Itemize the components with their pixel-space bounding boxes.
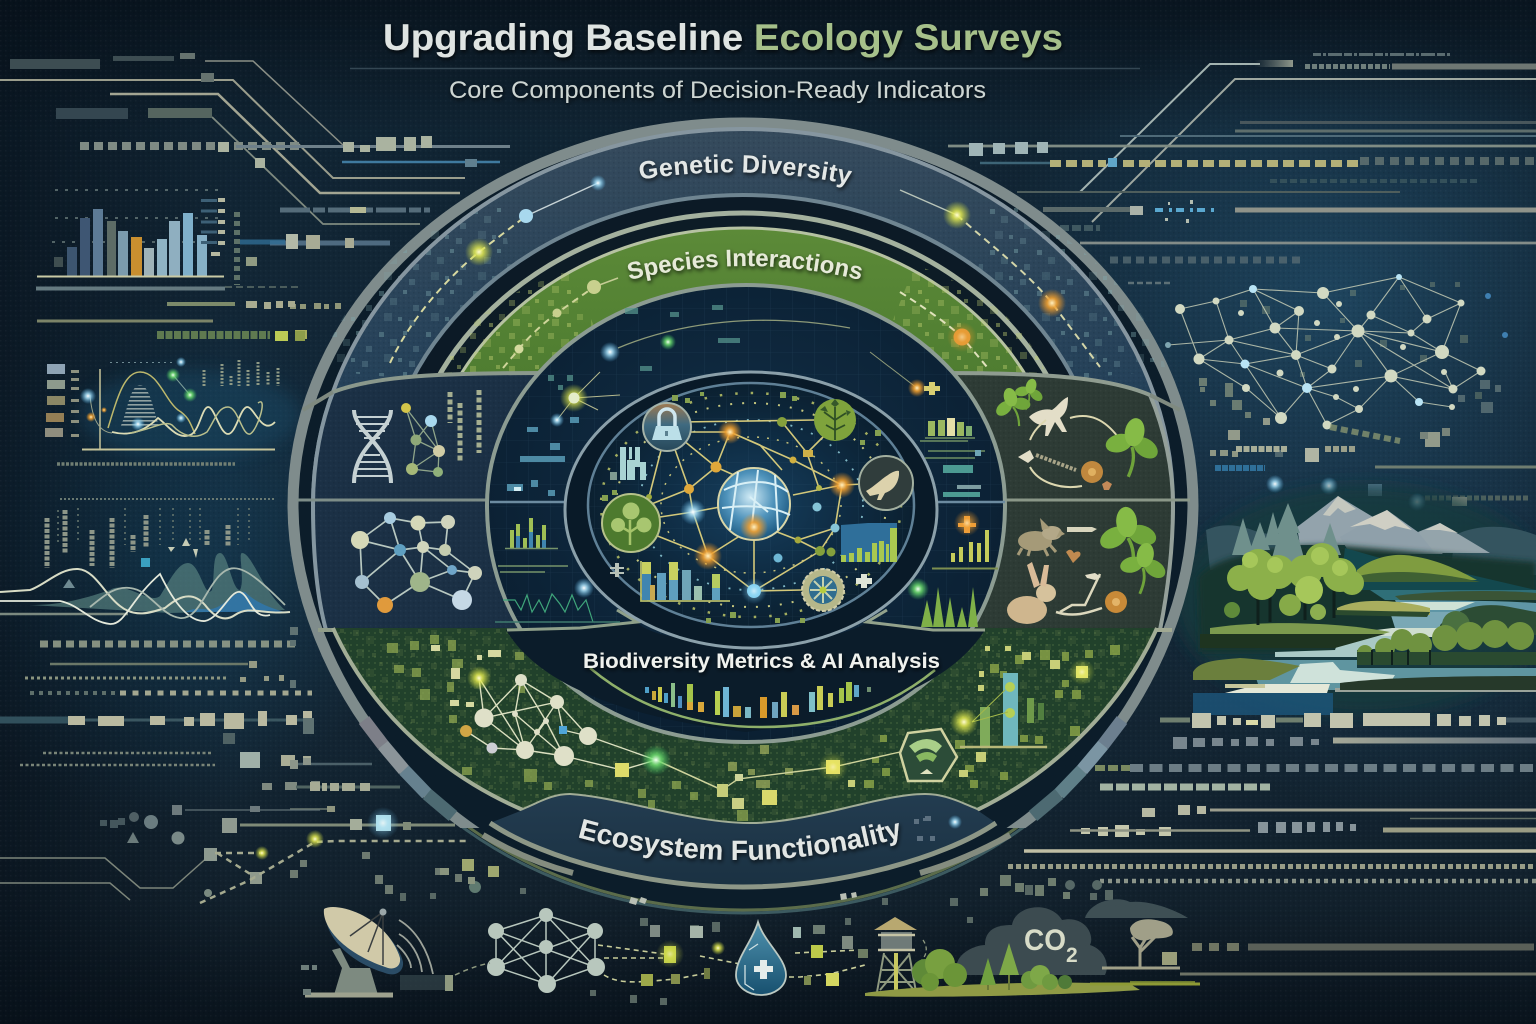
icon: bird bbox=[859, 456, 913, 510]
icon: satellite dish bbox=[301, 907, 453, 995]
label: species interactions: Species Interactions bbox=[626, 250, 864, 285]
plus signs bbox=[610, 563, 872, 588]
icons: species interaction lower bbox=[1007, 504, 1173, 624]
title: Upgrading Baseline Ecology Surveys bbox=[383, 17, 1063, 58]
circuit lines top left bbox=[0, 53, 510, 339]
band: genetic diversity bbox=[311, 127, 1175, 521]
icon: network cube bbox=[487, 908, 605, 993]
back hills bbox=[1206, 525, 1536, 575]
wave chart left bbox=[0, 464, 290, 624]
signal path to hexagon bbox=[615, 745, 900, 809]
network links bbox=[649, 420, 886, 591]
top arc nodes bbox=[507, 305, 940, 496]
data rows lower left bbox=[0, 627, 499, 903]
data rows right middle bbox=[1210, 448, 1536, 511]
bottom scatter squares bbox=[400, 885, 1113, 1005]
small scatter dots bbox=[602, 392, 881, 623]
icon: tree badge bbox=[602, 494, 660, 552]
mini bars lower core bbox=[645, 682, 871, 718]
bar chart in disc bbox=[641, 561, 730, 601]
icon: plant bbox=[814, 399, 856, 441]
water bbox=[1193, 590, 1536, 715]
landscape bbox=[1175, 485, 1536, 715]
teal block chart in disc bbox=[610, 447, 646, 480]
connectors between icons bbox=[455, 925, 926, 986]
icon: small network panel bbox=[401, 390, 479, 477]
panel: right upper and lower frames bbox=[945, 373, 1190, 630]
panel: left upper and lower frames bbox=[297, 373, 545, 630]
icons: species interaction upper bbox=[989, 375, 1166, 490]
label: ecosystem functionality: Ecosystem Functionality bbox=[578, 819, 902, 864]
icon: network in green field bbox=[460, 666, 722, 790]
central disc bbox=[565, 372, 937, 648]
data streaks left middle bbox=[36, 287, 305, 341]
landscape trees bbox=[865, 919, 1200, 997]
bar chart top left bbox=[37, 190, 298, 285]
icon: watchtower bbox=[874, 917, 917, 992]
label: genetic diversity: Genetic Diversity bbox=[638, 154, 854, 192]
core caption: Biodiversity Metrics & AI Analysis bbox=[583, 650, 940, 673]
text: CO2 bbox=[1024, 924, 1078, 967]
icon: DNA helix bbox=[354, 410, 391, 483]
panel: core with charts bbox=[487, 285, 1005, 742]
subtitle: Core Components of Decision-Ready Indicators bbox=[449, 77, 986, 104]
network nodes bbox=[646, 417, 855, 604]
text: CO2: 2 bbox=[1066, 944, 1078, 967]
node network right bbox=[1165, 274, 1508, 457]
icon: globe bbox=[718, 468, 790, 541]
band: species interactions bbox=[412, 193, 1074, 376]
icon: hexagon signal bbox=[900, 729, 957, 781]
icon: flower bbox=[802, 569, 844, 611]
icon: water drop bbox=[736, 922, 786, 995]
icon: large network panel bbox=[351, 512, 482, 613]
dashed signal arcs bbox=[390, 216, 526, 363]
line chart left bbox=[45, 357, 300, 460]
outer ring bbox=[290, 120, 1196, 913]
band: ecosystem functionality bbox=[482, 795, 1012, 905]
band: lower green data field bbox=[333, 628, 1157, 824]
squares and icons: lower green field bbox=[387, 635, 1120, 821]
icon: mini chart lower right bbox=[950, 659, 1095, 747]
mini charts left of disc bbox=[495, 518, 620, 622]
area chart in disc bbox=[841, 523, 897, 562]
icon: CO2 cloud scene bbox=[865, 899, 1200, 997]
data rows lower right bbox=[980, 713, 1536, 982]
text: CO2: CO bbox=[1024, 924, 1066, 957]
icon: padlock bbox=[643, 403, 691, 451]
mini charts right of disc bbox=[907, 418, 998, 627]
river banks bbox=[1337, 601, 1430, 615]
trees bbox=[1240, 575, 1334, 625]
circuit lines and rows top right bbox=[948, 54, 1536, 283]
